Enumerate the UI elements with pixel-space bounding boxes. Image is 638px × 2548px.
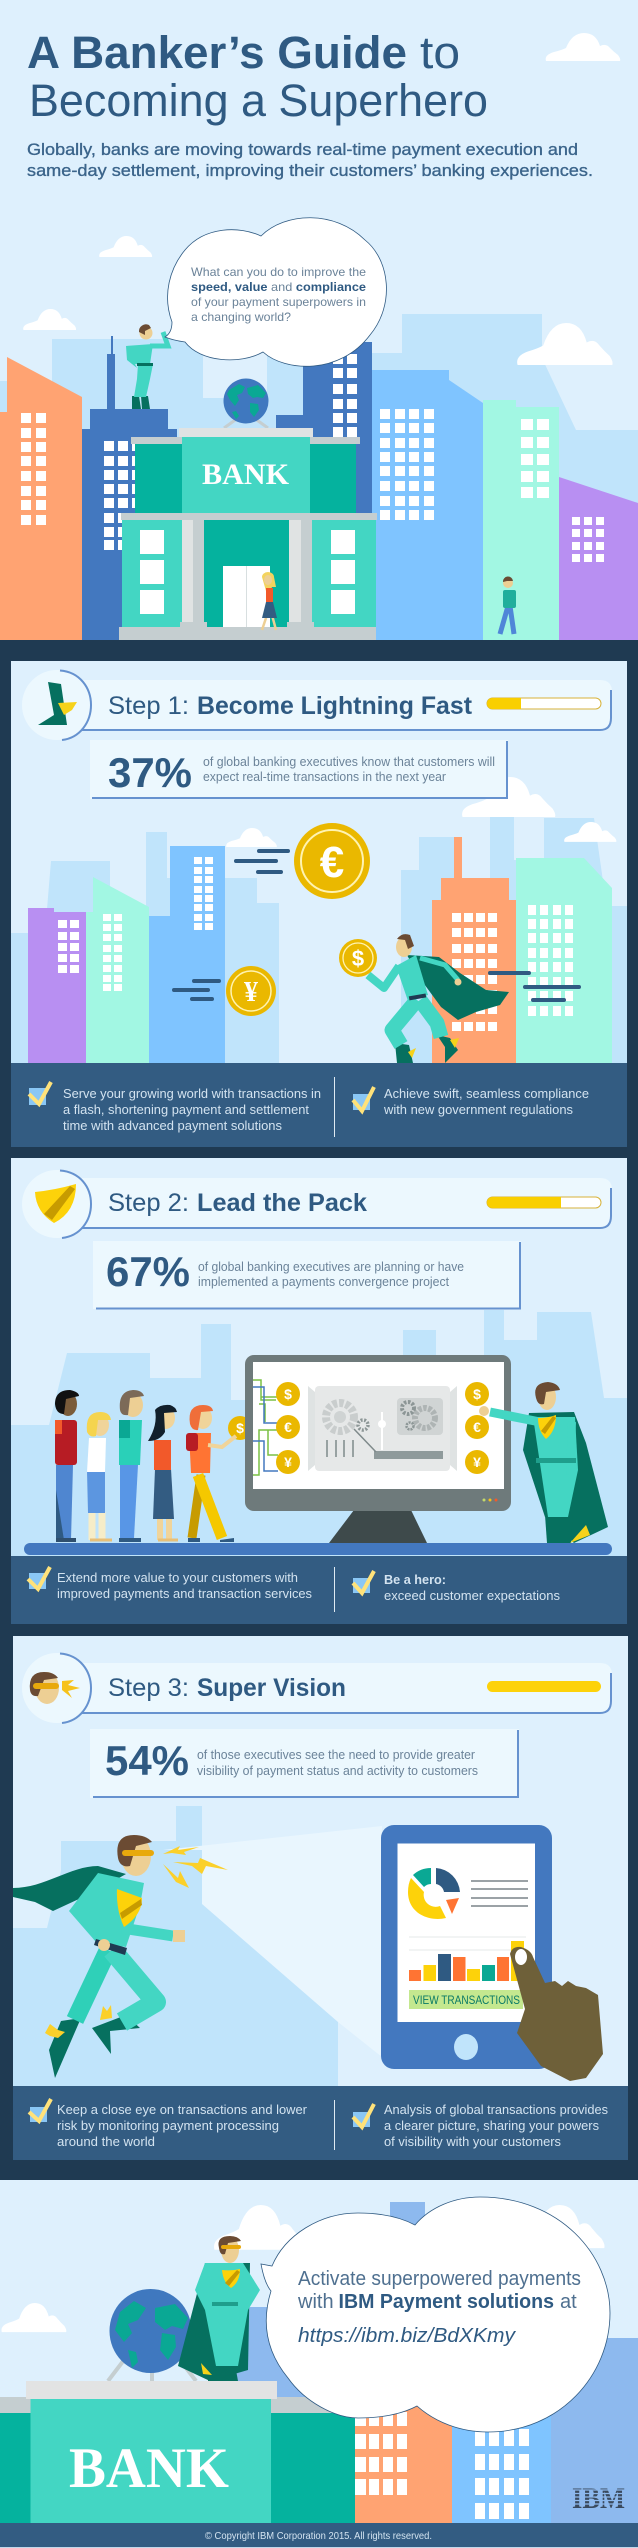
stat callout — [93, 1241, 521, 1309]
copyright bar — [0, 2523, 638, 2547]
subtitle: same-day settlement, improving their customers’ banking experiences. — [27, 162, 593, 180]
step heading — [22, 1170, 612, 1238]
bubble text: of your payment superpowers in — [191, 295, 366, 309]
background skyline — [0, 314, 638, 640]
bank building — [119, 428, 377, 640]
bubble text: IBM Payment solutions — [338, 2291, 554, 2313]
check icon — [353, 2104, 374, 2127]
legend lines — [471, 1881, 528, 1906]
panel: footer call to action — [0, 2180, 638, 2547]
coin: euro: € — [320, 838, 344, 887]
takeaways bar: Be a hero: — [384, 1573, 446, 1587]
figure: walker — [500, 576, 516, 634]
progress bar — [487, 1681, 601, 1692]
icon: globe — [108, 2289, 196, 2381]
lightning — [163, 1846, 228, 1888]
title: Becoming a Superhero — [29, 75, 488, 126]
buildings right — [355, 2400, 551, 2523]
person 1 — [55, 1390, 79, 1542]
button: VIEW TRANSACTIONS — [413, 1995, 520, 2007]
coins: $ — [284, 1386, 292, 1402]
people in queue — [55, 1390, 236, 1542]
icon: shield — [35, 1184, 76, 1223]
stat callout — [90, 740, 508, 799]
step heading: Step 3: — [108, 1674, 189, 1702]
coins: ¥ — [473, 1454, 481, 1470]
takeaways bar: a clearer picture, sharing your powers — [384, 2119, 599, 2133]
takeaways bar: of visibility with your customers — [384, 2135, 561, 2149]
network lines — [253, 1380, 278, 1475]
bar chart — [409, 1937, 526, 1981]
heading text: Step 1: — [108, 692, 189, 720]
hero flying — [13, 1835, 228, 2078]
stat callout: implemented a payments convergence project — [198, 1275, 450, 1289]
takeaways bar: Analysis of global transactions provides — [384, 2103, 608, 2117]
stat callout: of global banking executives know that customers will — [203, 755, 495, 769]
bubble text: https://ibm.biz/BdXKmy — [298, 2325, 516, 2347]
cloud: right — [517, 323, 613, 365]
bubble text: Activate superpowered payments — [298, 2268, 581, 2290]
progress bar — [487, 1197, 601, 1208]
figure: hero on rooftop — [126, 324, 168, 409]
stat callout: 37% — [108, 749, 192, 796]
background buildings — [232, 2202, 638, 2523]
person 3 — [119, 1390, 144, 1542]
hero presenting — [479, 1382, 608, 1543]
step heading: Super Vision — [197, 1674, 346, 1702]
bubble text: speed, value and compliance — [191, 280, 362, 294]
bubble text: What can you do to improve the — [191, 265, 366, 279]
coin: euro — [294, 823, 370, 899]
speech bubble — [261, 2197, 610, 2432]
coin: dollar — [339, 939, 377, 977]
clouds — [1, 2205, 605, 2332]
takeaways bar: Extend more value to your customers with — [57, 1571, 298, 1585]
stat callout: 67% — [106, 1248, 190, 1295]
subtitle: Globally, banks are moving towards real-time payment execution and — [27, 141, 578, 159]
IBM logo: IBM — [572, 2482, 625, 2515]
hero standing — [178, 2236, 260, 2381]
coin in hand: $ — [236, 1420, 244, 1436]
takeaways bar: around the world — [57, 2135, 155, 2149]
panel: step 3 — [13, 1636, 628, 2160]
bank rooftop and facade — [0, 2381, 355, 2523]
skyline — [11, 1310, 627, 1556]
stat callout: of those executives see the need to provide greater — [197, 1748, 475, 1762]
check icon — [29, 1082, 51, 1105]
takeaways bar: improved payments and transaction services — [57, 1587, 312, 1601]
speed lines — [174, 851, 579, 1000]
figure: woman at door — [262, 572, 277, 630]
button — [409, 1990, 523, 2009]
takeaways bar: a flash, shortening payment and settlement — [63, 1103, 310, 1117]
ground bar — [24, 1543, 612, 1555]
skyline — [11, 817, 627, 1063]
panel: intro header and city — [0, 0, 638, 640]
network lines — [253, 1387, 278, 1471]
buildings right — [432, 837, 612, 1063]
stat callout — [90, 1729, 519, 1798]
stat callout: 54% — [105, 1737, 189, 1784]
check icon — [353, 1087, 374, 1111]
vision beam — [163, 1826, 382, 2057]
progress bar — [487, 698, 601, 709]
takeaways bar — [13, 2086, 628, 2160]
takeaways bar: Achieve swift, seamless compliance — [384, 1087, 589, 1101]
cloud — [462, 777, 555, 817]
panel: step 1 — [11, 661, 627, 1147]
takeaways bar: exceed customer expectations — [384, 1589, 560, 1603]
stat callout: expect real-time transactions in the next year — [203, 770, 446, 784]
coin in hand — [228, 1416, 252, 1440]
icon: boot — [38, 682, 77, 725]
machine graphic — [308, 1386, 457, 1471]
skyline — [13, 1806, 338, 2086]
building: purple — [559, 477, 638, 640]
stat callout: of global banking executives are planning or have — [198, 1260, 464, 1274]
bank sign: BANK — [202, 458, 290, 491]
clouds — [23, 33, 620, 330]
speech bubble — [165, 218, 386, 366]
step heading — [22, 1653, 612, 1723]
bubble text: at — [560, 2291, 577, 2313]
coin: yen — [226, 966, 276, 1016]
panel: step 2 — [11, 1158, 627, 1624]
step heading: Lead the Pack — [197, 1189, 367, 1217]
building: dark blue left — [82, 336, 177, 640]
coins: € — [284, 1419, 292, 1435]
coins — [276, 1382, 489, 1474]
buildings left — [28, 846, 225, 1063]
takeaways bar: time with advanced payment solutions — [63, 1119, 282, 1133]
step heading — [22, 670, 612, 740]
title: to — [420, 27, 460, 78]
check icon — [28, 1567, 50, 1589]
takeaways bar: Keep a close eye on transactions and lower — [57, 2103, 307, 2117]
person 4 — [148, 1405, 178, 1540]
takeaways bar — [11, 1063, 627, 1147]
person 5 — [186, 1405, 236, 1542]
coins: ¥ — [284, 1454, 292, 1470]
stat callout: visibility of payment status and activity to customers — [197, 1764, 478, 1778]
hero running with coin — [368, 934, 509, 1063]
icon: hero with vision — [30, 1672, 80, 1704]
step heading: Step 2: — [108, 1189, 189, 1217]
building: mint — [483, 400, 559, 640]
clouds — [226, 822, 616, 847]
check icon — [29, 2099, 51, 2122]
takeaways bar: risk by monitoring payment processing — [57, 2119, 279, 2133]
takeaways bar: with new government regulations — [383, 1103, 573, 1117]
person 2 — [87, 1412, 112, 1540]
bank sign: BANK — [69, 2437, 229, 2500]
takeaways bar — [11, 1556, 627, 1624]
bubble text: with — [297, 2291, 334, 2313]
bubble text: a changing world? — [191, 310, 291, 324]
building: orange — [0, 357, 82, 640]
takeaways bar: Serve your growing world with transactions in — [63, 1087, 321, 1101]
donut chart — [408, 1868, 460, 1919]
copyright bar: © Copyright IBM Corporation 2015. All rights reserved. — [205, 2530, 432, 2542]
hand pointing — [510, 1947, 603, 2081]
monitor — [245, 1355, 511, 1543]
heading text: Become Lightning Fast — [197, 692, 473, 720]
check icon — [353, 1571, 374, 1593]
coins: $ — [473, 1386, 481, 1402]
building: dark blue tall — [276, 342, 372, 640]
title: A Banker’s Guide — [27, 27, 407, 78]
building: light blue — [372, 370, 483, 640]
tablet — [381, 1825, 552, 2069]
icon: globe on bank — [224, 378, 268, 428]
coin: yen: ¥ — [244, 977, 258, 1008]
coin: dollar: $ — [352, 946, 364, 971]
coins: € — [473, 1419, 481, 1435]
